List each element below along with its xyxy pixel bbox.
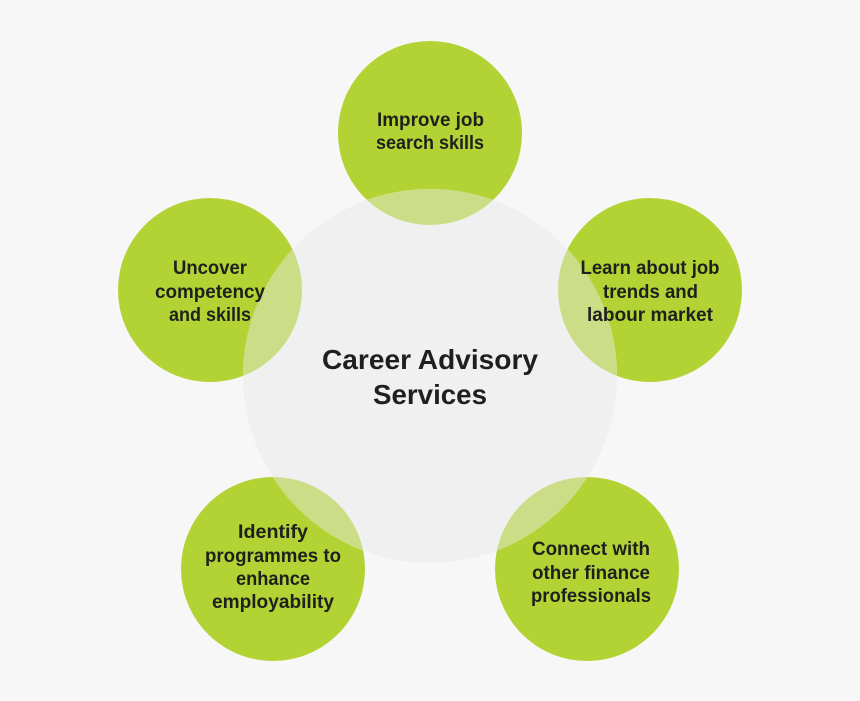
label: identify programmes: programmes to bbox=[205, 546, 341, 567]
label: connect with professionals: other finance bbox=[532, 563, 650, 584]
label: identify programmes: enhance bbox=[236, 569, 310, 590]
label: improve job search skills bbox=[376, 110, 484, 154]
title bbox=[322, 344, 539, 410]
circle: improve job search skills bbox=[338, 41, 522, 225]
label: uncover competency bbox=[155, 258, 265, 326]
label: learn about job trends bbox=[580, 258, 720, 326]
central circle bbox=[243, 189, 617, 563]
label: uncover competency: Uncover bbox=[173, 258, 248, 279]
label: identify programmes: Identify bbox=[238, 522, 308, 543]
label: learn about job trends: Learn about job bbox=[580, 258, 720, 279]
label: identify programmes bbox=[205, 522, 341, 613]
label: learn about job trends: labour market bbox=[587, 305, 714, 326]
circle: learn about job trends bbox=[558, 198, 742, 382]
label: improve job search skills: search skills bbox=[376, 133, 484, 154]
label: learn about job trends: trends and bbox=[603, 282, 698, 303]
circle: connect with professionals bbox=[495, 477, 679, 661]
label: uncover competency: and skills bbox=[169, 305, 251, 326]
title: Career Advisory bbox=[322, 344, 539, 375]
label: identify programmes: employability bbox=[212, 592, 334, 613]
overlap highlights bbox=[243, 189, 617, 550]
label: uncover competency: competency bbox=[155, 282, 265, 303]
label: connect with professionals: professionals bbox=[531, 586, 651, 607]
label: connect with professionals bbox=[531, 539, 651, 607]
circle: uncover competency bbox=[118, 198, 302, 382]
title: Services bbox=[373, 379, 487, 410]
label: connect with professionals: Connect with bbox=[532, 539, 650, 560]
label: improve job search skills: Improve job bbox=[377, 110, 484, 131]
circle: identify programmes bbox=[181, 477, 365, 661]
